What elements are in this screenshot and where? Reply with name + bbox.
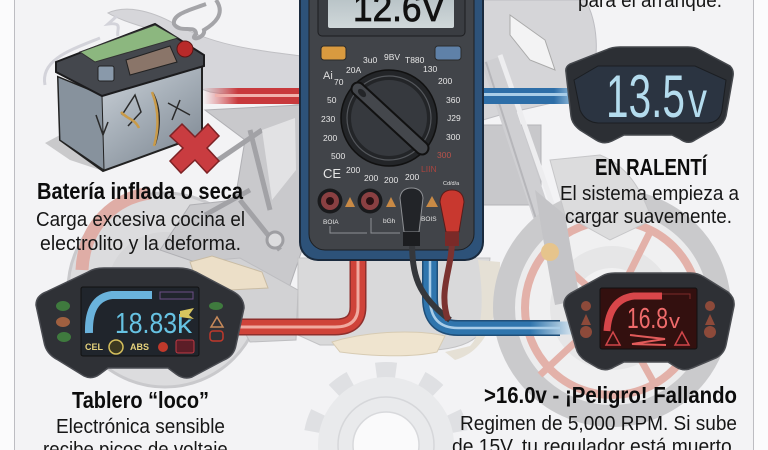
dial labels: LIIN <box>421 164 437 174</box>
jack labels <box>323 181 460 233</box>
warning triangles <box>345 196 438 207</box>
gauge: overvoltage danger display <box>564 273 734 370</box>
multimeter <box>300 0 483 320</box>
dial labels: 200 <box>346 165 360 175</box>
CEL label: CEL <box>85 342 104 352</box>
jack labels: BOIA <box>323 219 339 226</box>
LCD <box>328 0 454 28</box>
text: danger: Regimen de 5,000 RPM. Si sube <box>460 413 737 435</box>
idle voltage reading: v <box>688 72 707 128</box>
text: crazy dashboard: Tablero “loco” <box>72 387 209 413</box>
smoke <box>174 0 220 38</box>
motorcycle swingarm and frame <box>160 105 302 342</box>
engine warning lamp <box>109 340 123 354</box>
blue pipe: multimeter to idle display <box>482 88 572 104</box>
red pipe: battery to multimeter <box>203 88 303 104</box>
case <box>300 0 483 260</box>
orange button <box>321 46 346 60</box>
motorcycle headlight and fork <box>483 0 596 120</box>
motorcycle seat and tail <box>108 9 302 105</box>
dial labels: 200 <box>323 133 337 143</box>
danger reading: 16.8 <box>627 303 668 335</box>
text: danger: >16.0v - ¡Peligro! Fallando <box>484 382 737 408</box>
battery lid <box>56 24 204 96</box>
text: crazy dashboard: Electrónica sensible <box>56 416 225 438</box>
dashboard reading: 18.83 <box>115 308 177 340</box>
blue arc gauge <box>89 295 152 333</box>
dial labels: 200 <box>384 175 398 185</box>
text: idle: EN RALENTÍ <box>595 153 707 180</box>
dial labels: Ai <box>323 70 333 82</box>
idle voltage reading: 13.5 <box>606 63 685 130</box>
dial labels: 50 <box>327 95 337 105</box>
motorcycle front wheel <box>504 200 720 416</box>
text: swollen battery: Carga excesiva cocina el <box>36 209 245 231</box>
red pipe: multimeter to dashboard <box>238 258 358 327</box>
dial labels: 500 <box>331 151 345 161</box>
text: swollen battery <box>36 178 245 255</box>
dial labels: CE <box>323 166 341 181</box>
blue button <box>435 46 461 60</box>
jack labels: BOIS <box>421 216 437 223</box>
red arc gauge <box>607 296 662 331</box>
gauge: idle voltage display <box>566 47 733 143</box>
rotary knob <box>341 70 437 166</box>
cracks <box>96 93 190 145</box>
gauge: erratic dashboard <box>36 268 244 378</box>
dial labels: 130 <box>423 64 437 74</box>
blue pipe: multimeter to danger display <box>430 258 572 328</box>
dial labels: 200 <box>364 173 378 183</box>
warning triangles <box>606 332 689 345</box>
terminal jacks <box>318 188 382 214</box>
oil lamp <box>158 342 168 352</box>
red probe and lead <box>440 190 464 320</box>
black probe and lead <box>400 188 450 320</box>
dial labels: 9BV <box>384 52 400 62</box>
gear icon <box>302 361 470 450</box>
text: swollen battery: Batería inflada o seca <box>37 178 243 204</box>
dial labels: T880 <box>405 55 425 65</box>
dial labels: 230 <box>321 114 335 124</box>
dial labels: 200 <box>438 76 452 86</box>
dial labels: J29 <box>447 113 461 123</box>
text: danger <box>452 382 737 450</box>
battery body <box>58 65 202 171</box>
text: crazy dashboard <box>43 387 233 450</box>
red X <box>170 124 219 173</box>
dial labels: 360 <box>446 95 460 105</box>
battery lamp <box>176 340 194 353</box>
side lamps <box>580 301 716 338</box>
dial labels: 200 <box>405 172 419 182</box>
battery with cracks and red X <box>44 0 220 173</box>
text: idle: cargar suavemente. <box>565 206 732 228</box>
motorcycle rear wheel <box>68 193 262 387</box>
jack labels: bGh <box>383 218 396 225</box>
ABS label: ABS <box>130 342 149 352</box>
dial labels: 300 <box>437 150 451 160</box>
logo mark <box>630 335 666 345</box>
left lamps <box>56 301 71 342</box>
text: idle: El sistema empieza a <box>560 183 740 205</box>
motorcycle background illustration <box>68 0 720 416</box>
dial labels: 3u0 <box>363 55 377 65</box>
dial labels: 300 <box>446 132 460 142</box>
text: swollen battery: electrolito y la deforma. <box>40 233 241 255</box>
terminals <box>98 66 114 81</box>
danger reading: v <box>669 311 680 333</box>
dashboard reading: k <box>177 309 193 339</box>
dial labels: 20A <box>346 65 361 75</box>
display bezel <box>318 0 465 36</box>
motorcycle engine and exhaust <box>298 258 490 350</box>
right lamps <box>209 302 223 341</box>
ground shadow <box>45 135 103 171</box>
dial labels <box>321 52 461 185</box>
warning flash <box>180 308 194 319</box>
jack labels: Cd/d/a <box>443 181 460 187</box>
purple graph <box>160 292 193 299</box>
dial labels: 70 <box>334 77 344 87</box>
text: idle <box>560 153 740 228</box>
